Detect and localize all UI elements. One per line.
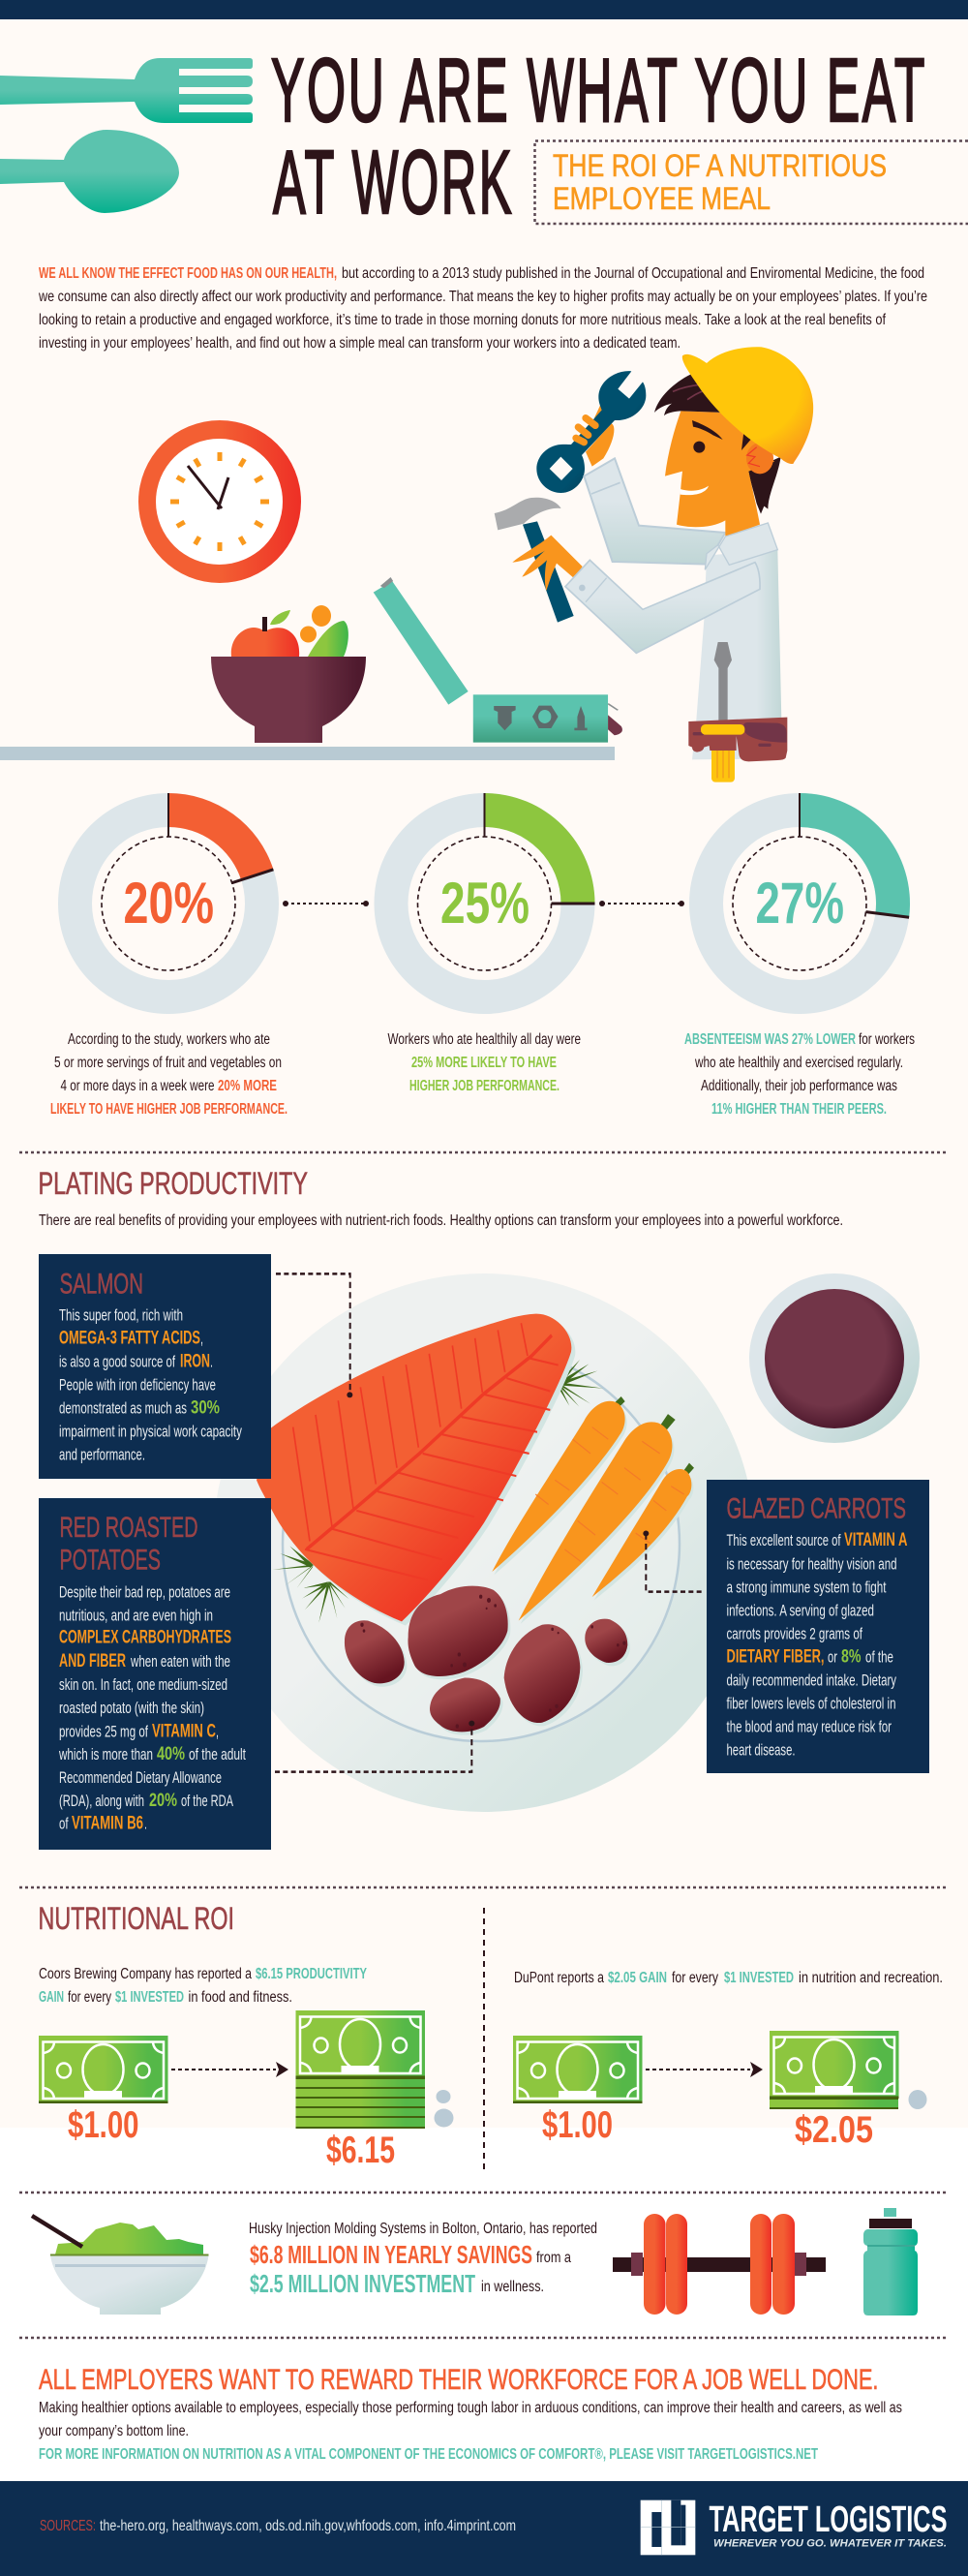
salmon body: People with iron deficiency have [59,1375,216,1394]
salmon body: demonstrated as much as [59,1398,187,1417]
logo [641,2499,947,2555]
carrots body: the blood and may reduce risk for [726,1717,892,1735]
logo: WHEREVER YOU GO. WHATEVER IT TAKES. [713,2537,947,2549]
text: DuPont: $1 INVESTED [724,1970,794,1986]
donut chart: 25% [391,793,594,997]
salmon body [59,1305,242,1463]
potatoes body: COMPLEX CARBOHYDRATES [59,1627,231,1648]
icon: fork [0,58,253,123]
donut chart: 20% [76,793,273,997]
subtitle box: THE ROI OF A NUTRITIOUS [553,148,887,183]
potatoes body: when eaten with the [130,1652,230,1671]
carrots body: infections. A serving of glazed [726,1602,874,1619]
potatoes body: provides 25 mg of [59,1722,148,1741]
stat text: 25%: 25% MORE LIKELY TO HAVE [411,1055,557,1071]
panel: red roasted potatoes [39,1498,271,1850]
stat text: 27%: Additionally, their job performance was [701,1078,897,1094]
potatoes body: skin on. In fact, one medium-sized [59,1675,227,1694]
carrots body: a strong immune system to fight [726,1579,887,1596]
potatoes body: 20% [149,1790,177,1811]
stat text: 27%: 11% HIGHER THAN THEIR PEERS. [711,1101,887,1118]
sources: the-hero.org, healthways.com, ods.od.nih.gov,whfoods.com, info.4imprint.com [100,2518,516,2534]
top bar [0,0,968,19]
carrots body: VITAMIN A [844,1529,908,1550]
stat text: 25%: HIGHER JOB PERFORMANCE. [409,1078,560,1094]
icon: herb sprigs [273,1360,603,1623]
worker illustration [495,347,813,782]
text: DuPont: in nutrition and recreation. [799,1970,943,1986]
connector: salmon [276,1273,352,1397]
potatoes body: which is more than [58,1745,153,1763]
value: $6.15: $6.15 [326,2130,395,2171]
potatoes heading [60,1512,197,1577]
carrots body: 8% [841,1646,862,1668]
icon: $1.00 bill (DuPont) [513,2036,643,2103]
carrots [492,1396,694,1624]
stat text: 20%: 4 or more days in a week were [60,1078,215,1094]
worker torso [692,550,784,759]
text: Husky savings: in wellness. [481,2279,544,2295]
stat text: 20%: According to the study, workers who ate [68,1031,270,1048]
plate illustration [213,1273,755,1812]
text: Husky savings: from a [536,2250,571,2266]
hammer head [495,498,561,530]
stat text: 20% [50,1031,287,1118]
icon: spoon [0,130,179,213]
stat text: 27%: who ate healthily and exercised regularly. [694,1055,903,1071]
icon: coins (Coors) [434,2090,453,2127]
text: Husky savings: $6.8 MILLION IN YEARLY SAVINGS [250,2240,532,2269]
icon: water bottle [863,2208,918,2315]
potatoes body: of [59,1815,69,1833]
intro text: investing in your employees’ health, and find out how a simple meal can transform your workers into a dedicated team. [39,335,681,352]
text: Coors: Coors Brewing Company has reported a [39,1966,252,1982]
text: Coors: $1 INVESTED [115,1989,184,2006]
potatoes [345,1586,630,1735]
potatoes body: 40% [157,1743,185,1764]
stat text: 20%: 5 or more servings of fruit and vegetables on [54,1055,282,1071]
subtitle box [534,141,968,224]
subtitle box: EMPLOYEE MEAL [553,181,771,216]
icon: salad bowl [32,2216,209,2315]
text: Husky savings: Husky Injection Molding Systems in Bolton, Ontario, has reported [249,2221,597,2237]
stat text: 25%: Workers who ate healthily all day were [387,1031,581,1048]
intro text: WE ALL KNOW THE EFFECT FOOD HAS ON OUR HEALTH, [39,265,337,282]
sources: SOURCES: [40,2518,96,2534]
panel: salmon [39,1254,271,1479]
salmon body: impairment in physical work capacity [59,1422,242,1440]
stat text: 20%: 20% MORE [218,1078,277,1094]
text: Husky savings: $2.5 MILLION INVESTMENT [250,2269,475,2298]
value: $1.00 (Coors): $1.00 [68,2104,139,2146]
carrots body: heart disease. [726,1740,796,1759]
panel: glazed carrots [707,1480,929,1773]
carrots body: This excellent source of [726,1531,841,1549]
icon: toolbox [374,577,622,743]
potatoes body: Despite their bad rep, potatoes are [59,1582,230,1602]
donut chart: 25%: 25% [440,871,529,935]
text: DuPont: for every [672,1970,718,1986]
potatoes body: (RDA), along with [59,1792,144,1810]
potatoes body: VITAMIN C [152,1720,216,1741]
potatoes body [58,1582,246,1834]
carrots body [726,1529,908,1759]
shelf [0,747,615,760]
stat text: 20%: LIKELY TO HAVE HIGHER JOB PERFORMANCE. [50,1101,287,1118]
salmon fillet [257,1314,575,1626]
carrots body: of the [865,1648,893,1666]
text: Coors: for every [68,1989,111,2006]
arrow: DuPont [646,2062,763,2077]
icon: wall clock [138,420,301,583]
carrots body: DIETARY FIBER, [726,1646,825,1668]
icon: sauce dish [749,1273,920,1443]
closing paragraph [39,2400,902,2439]
text: DuPont [514,1970,943,1986]
value: $2.05: $2.05 [795,2109,873,2151]
title [271,40,927,232]
potatoes body: of the adult [189,1745,246,1763]
salmon body: , [200,1329,203,1347]
icon: fruit bowl [211,605,366,743]
salmon body: is also a good source of [59,1352,175,1370]
potatoes body: roasted potato (with the skin) [59,1699,204,1717]
text: Coors [39,1966,367,2006]
stat text: 27% [684,1031,915,1118]
salmon body: IRON [180,1350,210,1371]
value: $1.00 (DuPont): $1.00 [542,2104,613,2146]
worker lower arm, hammer and tool belt [512,521,787,782]
stat text: 27%: for workers [859,1031,915,1048]
salmon body: and performance. [59,1445,145,1463]
closing paragraph: your company’s bottom line. [39,2423,189,2439]
potatoes body: VITAMIN B6 [72,1813,143,1834]
donut chart: 20%: 20% [124,871,214,935]
donut chart: 27%: 27% [755,871,844,935]
heading: plating productivity: PLATING PRODUCTIVITY [39,1166,308,1201]
heading: nutritional ROI: NUTRITIONAL ROI [39,1901,234,1936]
potatoes heading: POTATOES [60,1544,161,1577]
salmon heading: SALMON [60,1269,143,1301]
text: Coors: GAIN [39,1989,64,2006]
icon: $6.15 bill stack [296,2010,425,2129]
connector: potatoes [275,1721,474,1772]
worker head and raised arm [536,347,813,565]
potatoes body: nutritious, and are even high in [59,1606,213,1625]
title: AT WORK [273,132,514,232]
potatoes body: , [216,1722,219,1741]
icon: coin (DuPont) [908,2090,927,2109]
carrots body: or [828,1648,837,1666]
potatoes heading: RED ROASTED [60,1512,197,1544]
stat text: 27%: ABSENTEEISM WAS 27% LOWER [684,1031,856,1048]
text: Coors: $6.15 PRODUCTIVITY [256,1966,367,1982]
arrow: Coors [171,2062,288,2077]
text: DuPont: DuPont reports a [514,1970,604,1986]
intro text [38,265,927,352]
potatoes body: AND FIBER [59,1650,126,1671]
icon: $1.00 bill (Coors) [39,2036,168,2103]
connector dots [283,901,684,906]
icon: $2.05 bill stack [770,2031,898,2109]
potatoes body: Recommended Dietary Allowance [59,1768,222,1787]
donut chart: 27% [707,793,910,997]
salmon body: . [210,1352,213,1370]
footer [0,2481,968,2576]
salmon body: This super food, rich with [59,1305,183,1324]
stat text: 25% [387,1031,581,1094]
salmon body: OMEGA-3 FATTY ACIDS [59,1327,200,1348]
text: Coors: in food and fitness. [188,1989,292,2006]
potatoes body: . [144,1815,147,1833]
text: Husky savings [249,2221,597,2298]
text: DuPont: $2.05 GAIN [608,1970,667,1986]
potatoes body: of the RDA [181,1792,233,1810]
carrots body: carrots provides 2 grams of [726,1625,862,1642]
salmon body: 30% [191,1396,220,1418]
connector: carrots [643,1531,704,1592]
icon: dumbbell [613,2214,826,2315]
